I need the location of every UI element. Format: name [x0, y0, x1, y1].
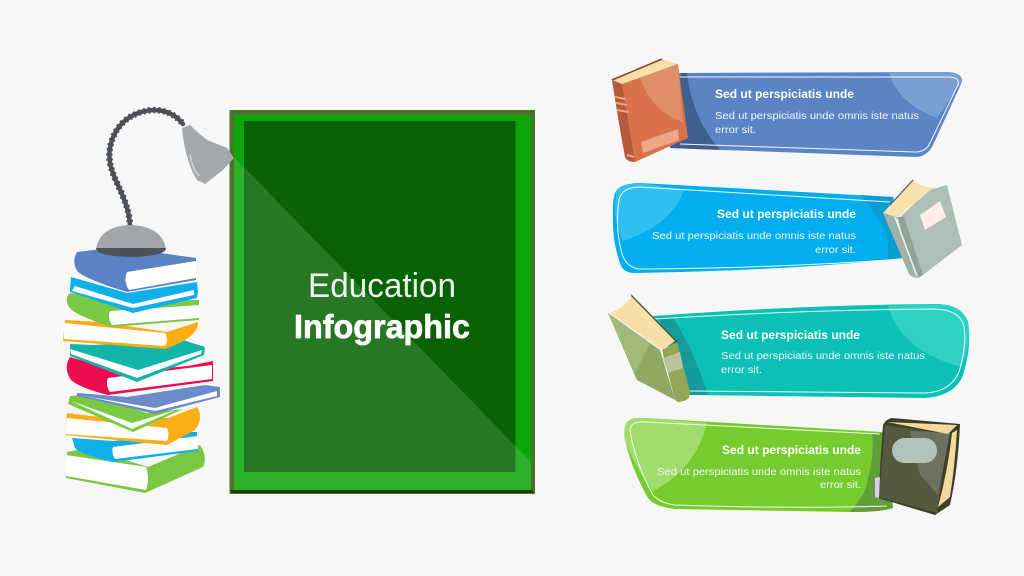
text: banner 2: error sit. — [815, 244, 856, 256]
title: Education — [308, 267, 456, 305]
book: cyan open — [70, 277, 198, 313]
title: Infographic — [294, 308, 470, 345]
book: teal open — [70, 340, 205, 382]
icon: green book — [608, 294, 690, 402]
panel: banner 2 cyan — [613, 183, 903, 273]
text: banner 1: Sed ut perspiciatis unde — [715, 87, 854, 101]
icon: desk lamp — [96, 110, 234, 257]
icon: stack of books — [63, 247, 220, 493]
text: banner 2 — [652, 207, 856, 256]
text: banner 2: Sed ut perspiciatis unde — [717, 207, 856, 221]
book: orange — [63, 320, 198, 349]
book: green open — [68, 395, 183, 432]
text: banner 3: error sit. — [721, 364, 762, 376]
panel: banner 4 green — [624, 418, 893, 512]
icon: orange book — [612, 59, 688, 162]
book: green bottom — [66, 445, 205, 493]
text: banner 1 — [715, 87, 919, 136]
text: banner 4: Sed ut perspiciatis unde — [722, 443, 861, 457]
panel: banner 3 teal — [653, 304, 969, 398]
panel: banner 1 blue — [670, 72, 962, 157]
book: cyan lower — [72, 432, 198, 462]
book: green — [67, 293, 199, 327]
book: blue — [74, 247, 196, 292]
text: banner 4: Sed ut perspiciatis unde omnis iste natus — [657, 466, 861, 478]
text: banner 3: Sed ut perspiciatis unde — [721, 328, 860, 342]
text: banner 4 — [657, 443, 861, 491]
text: banner 2: Sed ut perspiciatis unde omnis iste natus — [652, 230, 856, 242]
book: red — [67, 357, 213, 395]
text: banner 3 — [721, 328, 925, 376]
panel: green chalkboard — [230, 110, 535, 494]
text: banner 3: Sed ut perspiciatis unde omnis iste natus — [721, 350, 925, 362]
book: periwinkle open — [77, 385, 220, 414]
text: banner 4: error sit. — [820, 479, 861, 491]
text: banner 1: Sed ut perspiciatis unde omnis iste natus — [715, 110, 919, 122]
icon: dark olive book — [875, 418, 960, 515]
title — [294, 267, 470, 345]
icon: grey-green book — [883, 180, 962, 278]
text: banner 1: error sit. — [715, 124, 756, 136]
book: orange lower — [65, 407, 200, 445]
